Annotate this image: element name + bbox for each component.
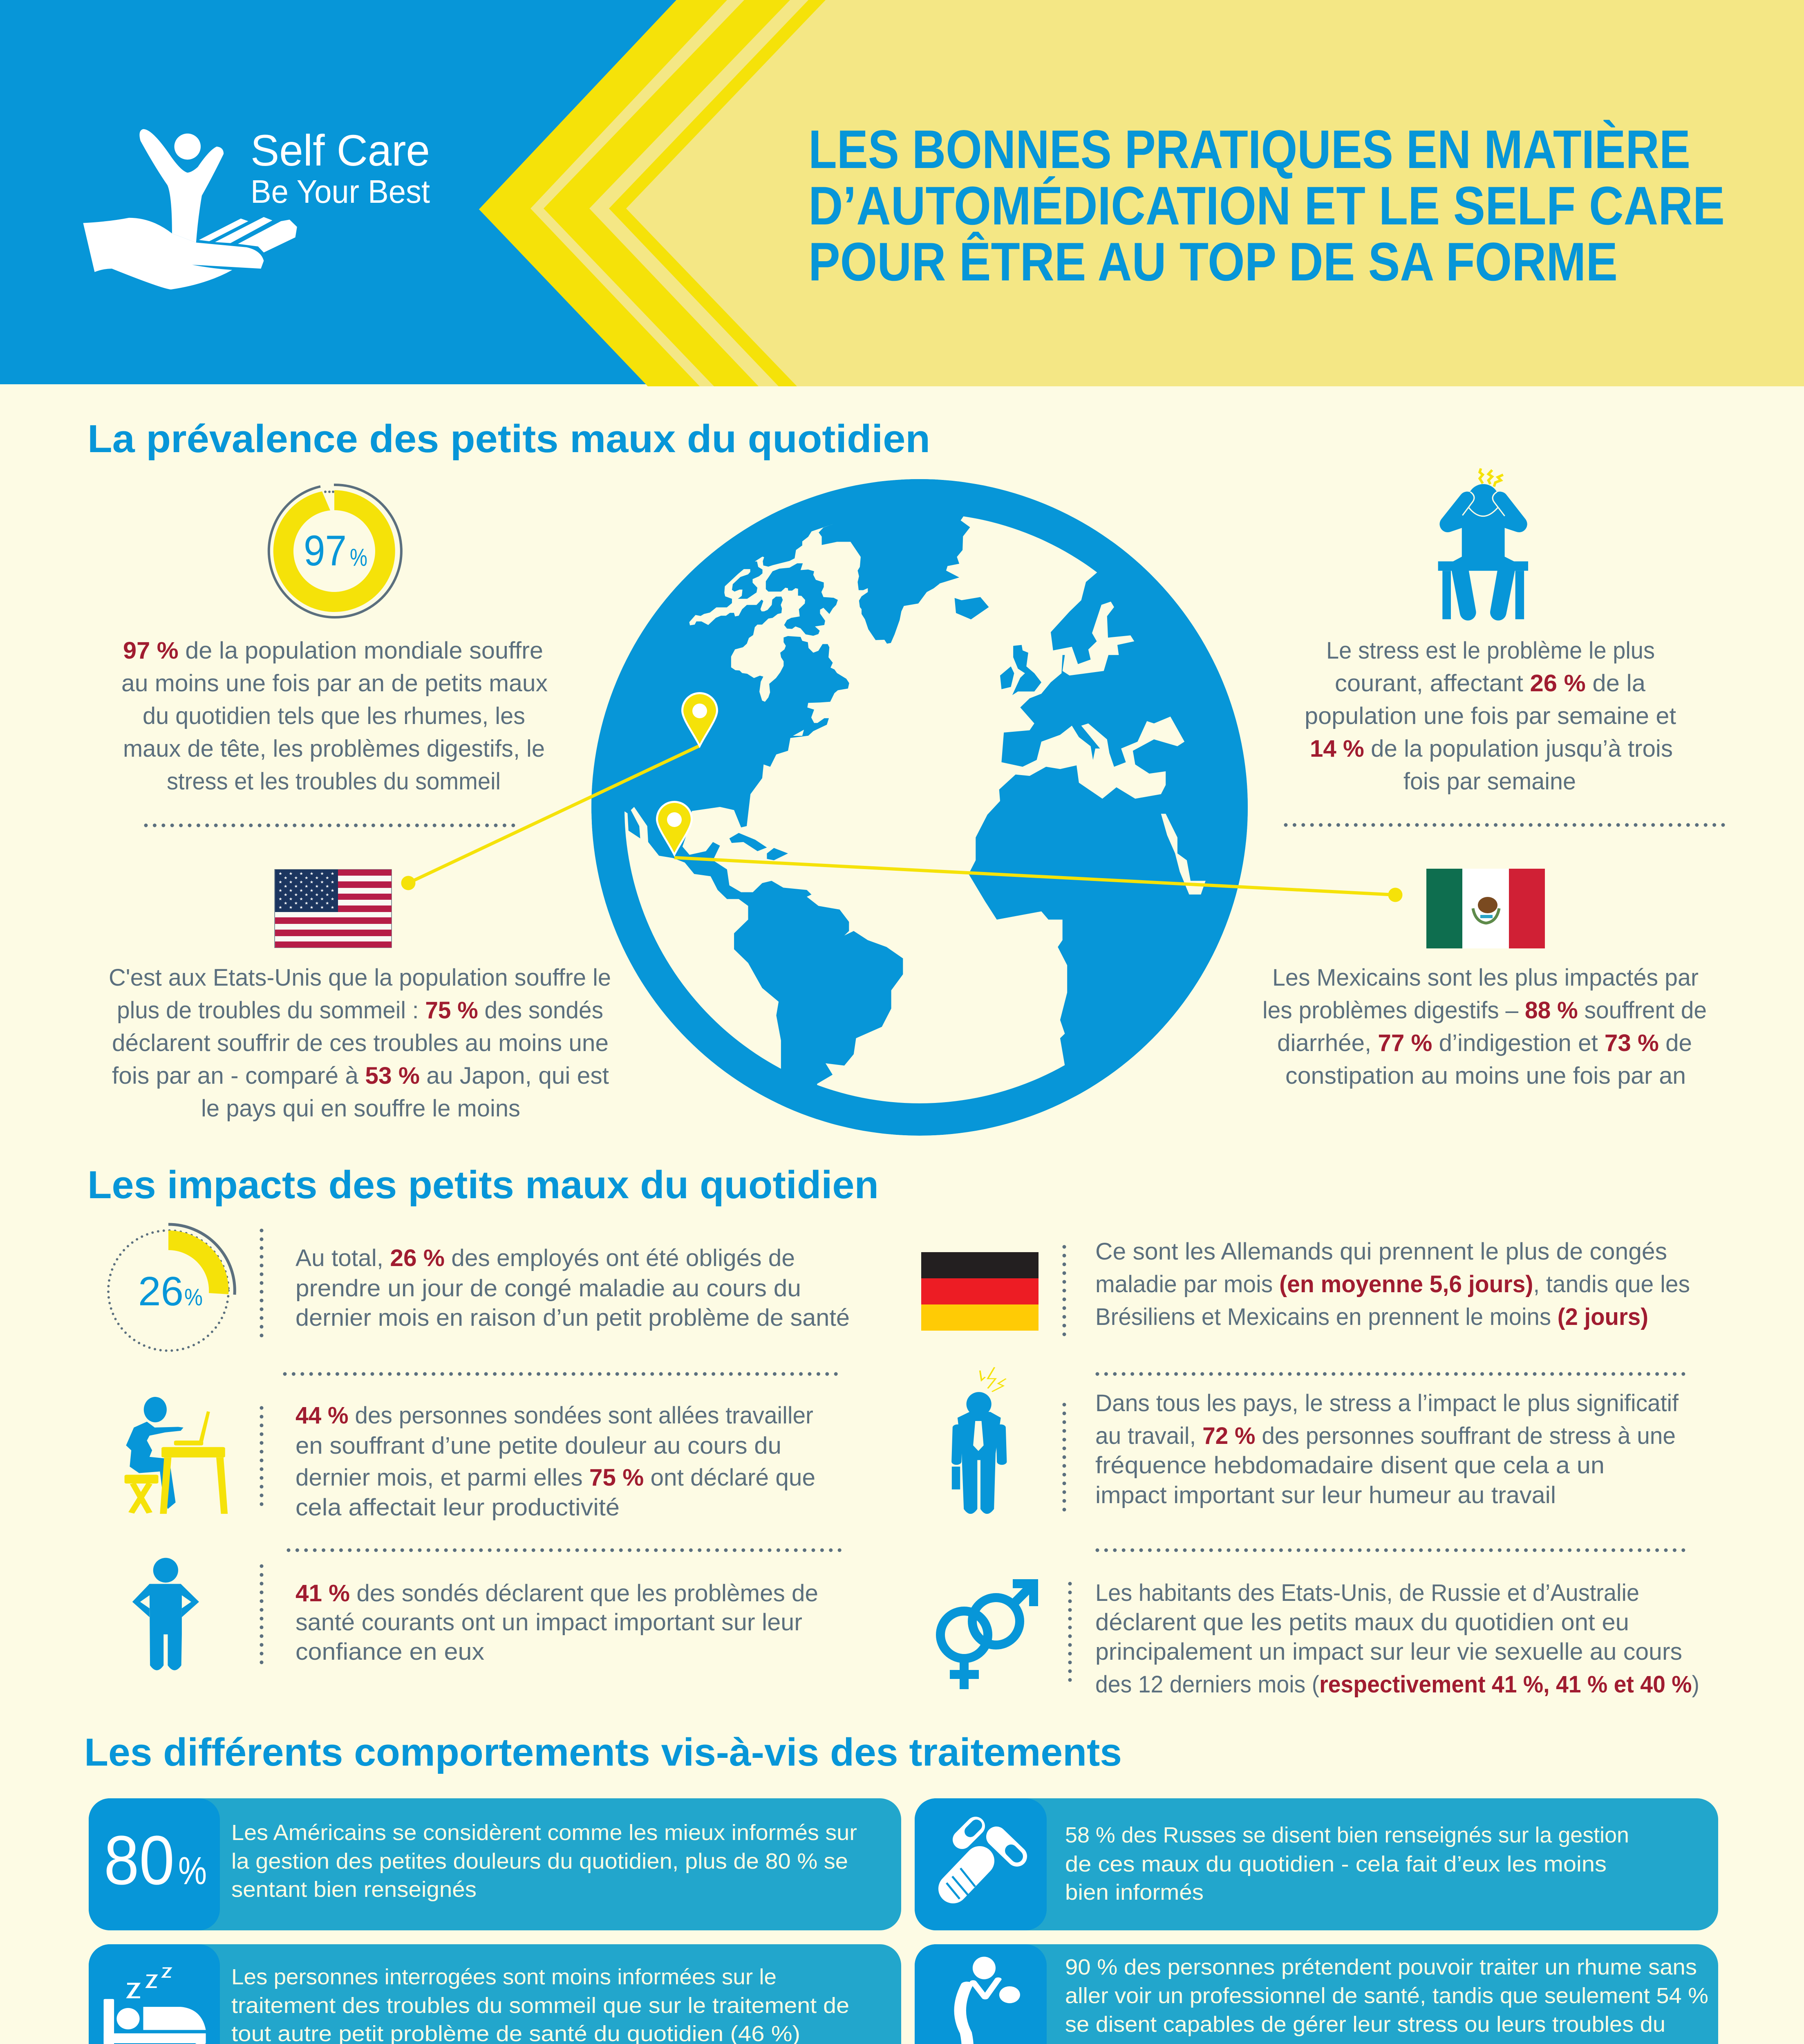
text: Mexico: les problèmes digestifs – 88 % souffrent de	[1262, 997, 1707, 1024]
panel text: Les personnes interrogées sont moins informées sur le	[231, 1965, 777, 1989]
text: stress: 14 % de la population jusqu’à trois	[1310, 735, 1673, 762]
panel: 80 percent informed	[89, 1798, 901, 1930]
panel text: la gestion des petites douleurs du quotidien, plus de 80 % se	[231, 1849, 848, 1874]
text: 44 percent	[295, 1402, 815, 1521]
text: sex life: principalement un impact sur leur vie sexuelle au cours	[1095, 1638, 1682, 1665]
text: 44 percent: dernier mois, et parmi elles 75 % ont déclaré que	[295, 1464, 815, 1491]
panel text	[231, 1820, 857, 1902]
text: sex life	[1095, 1580, 1699, 1698]
panel text: aller voir un professionnel de santé, tandis que seulement 54 %	[1065, 1983, 1708, 2008]
title: POUR ÊTRE AU TOP DE SA FORME	[808, 231, 1618, 292]
80 percent figure: 80	[104, 1822, 175, 1899]
text: Mexico: Les Mexicains sont les plus impactés par	[1272, 964, 1699, 991]
text: stress at work: fréquence hebdomadaire disent que cela a un	[1095, 1452, 1605, 1479]
80 percent figure: %	[178, 1849, 207, 1893]
text: 97 percent: stress et les troubles du sommeil	[167, 768, 501, 795]
text: 41 percent: 41 % des sondés déclarent que les problèmes de	[295, 1580, 818, 1607]
text: 97 percent: 97 % de la population mondiale souffre	[123, 637, 543, 664]
icon: coughing person	[960, 1957, 1020, 2044]
text: 26 percent sick leave: dernier mois en raison d’un petit problème de santé	[295, 1304, 850, 1331]
logo text: Be Your Best	[251, 173, 430, 210]
panel text: traitement des troubles du sommeil que sur le traitement de	[231, 1993, 849, 2018]
text: stress at work: impact important sur leur humeur au travail	[1095, 1482, 1556, 1508]
title	[808, 119, 1725, 292]
logo text	[251, 126, 430, 210]
text: stress: Le stress est le problème le plus	[1326, 637, 1655, 664]
text: stress at work: Dans tous les pays, le stress a l’impact le plus significatif	[1095, 1390, 1679, 1416]
text: 41 percent: santé courants ont un impact important sur leur	[295, 1609, 802, 1636]
icon: Germany flag	[921, 1252, 1039, 1331]
panel text	[231, 1965, 849, 2044]
text: Germany: Ce sont les Allemands qui prennent le plus de congés	[1095, 1238, 1667, 1265]
text: 44 percent: cela affectait leur productivité	[295, 1494, 620, 1521]
panel: cold vs stress	[915, 1944, 1718, 2044]
text: stress: fois par semaine	[1403, 768, 1576, 795]
text: 97 percent: du quotidien tels que les rhumes, les	[143, 703, 525, 729]
text: USA: plus de troubles du sommeil : 75 % des sondés	[117, 997, 603, 1024]
text: 26 percent sick leave: prendre un jour de congé maladie au cours du	[295, 1275, 801, 1302]
text: stress at work	[1095, 1390, 1679, 1508]
text: USA: déclarent souffrir de ces troubles au moins une	[112, 1030, 609, 1056]
text: Mexico	[1262, 964, 1707, 1089]
chart: 97 percent donut: %	[350, 544, 367, 571]
connector dot: USA	[401, 876, 415, 890]
chart: 26 percent wedge: %	[184, 1284, 203, 1311]
connector line: Mexico	[674, 858, 1395, 895]
chart: 26 percent wedge: 26	[138, 1269, 184, 1314]
panel text	[1065, 1955, 1708, 2044]
text: Mexico: constipation au moins une fois par an	[1285, 1062, 1686, 1089]
chart: 26 percent wedge	[108, 1224, 235, 1351]
text: 41 percent	[295, 1580, 818, 1665]
text: Mexico: diarrhée, 77 % d’indigestion et 73 % de	[1277, 1030, 1692, 1056]
heading: prevalence: La prévalence des petits maux du quotidien	[87, 417, 930, 461]
text: Germany	[1095, 1238, 1690, 1330]
text: USA	[109, 964, 611, 1122]
chart: 97 percent donut: 97	[304, 527, 347, 575]
text: 97 percent: au moins une fois par an de petits maux	[121, 670, 548, 697]
panel text: bien informés	[1065, 1880, 1204, 1905]
text: 44 percent: en souffrant d’une petite douleur au cours du	[295, 1432, 781, 1459]
panel text: 58 % des Russes se disent bien renseignés sur la gestion	[1065, 1823, 1629, 1847]
text: sex life: Les habitants des Etats-Unis, de Russie et d’Australie	[1095, 1580, 1639, 1606]
icon: person sleeping in bed	[104, 1968, 206, 2044]
panel text: sentant bien renseignés	[231, 1877, 477, 1902]
text: sex life: des 12 derniers mois (respectivement 41 %, 41 % et 40 %)	[1095, 1671, 1699, 1698]
text: 97 percent: maux de tête, les problèmes digestifs, le	[123, 735, 545, 762]
icon: self care logo hand and person	[83, 129, 297, 289]
heading: behaviours: Les différents comportements vis-à-vis des traitements	[84, 1730, 1122, 1774]
icon: stressed businessman	[952, 1367, 1006, 1514]
icon: confident standing person	[132, 1558, 199, 1670]
chart: 97 percent donut	[269, 485, 401, 617]
icon: gender symbols	[940, 1579, 1038, 1689]
panel text	[1065, 1823, 1629, 1905]
text: stress: population une fois par semaine et	[1305, 703, 1676, 729]
icon: map pin USA	[681, 692, 718, 748]
text: 26 percent sick leave	[295, 1245, 850, 1331]
text: stress at work: au travail, 72 % des personnes souffrant de stress à une	[1095, 1423, 1676, 1449]
text: stress	[1305, 637, 1676, 795]
header banner	[0, 0, 1804, 387]
text: USA: fois par an - comparé à 53 % au Japon, qui est	[112, 1062, 609, 1089]
panel text: 90 % des personnes prétendent pouvoir traiter un rhume sans	[1065, 1955, 1697, 1979]
text: Germany: maladie par mois (en moyenne 5,6 jours), tandis que les	[1095, 1271, 1690, 1298]
icon: Mexico flag	[1426, 869, 1545, 948]
text: USA: C'est aux Etats-Unis que la population souffre le	[109, 964, 611, 991]
text: 97 percent	[121, 637, 548, 795]
panel text: se disent capables de gérer leur stress ou leurs troubles du	[1065, 2012, 1665, 2037]
connector dot: Mexico	[1388, 888, 1403, 902]
panel text: Les Américains se considèrent comme les mieux informés sur	[231, 1820, 857, 1845]
text: sex life: déclarent que les petits maux du quotidien ont eu	[1095, 1609, 1629, 1636]
panel: Russians informed	[915, 1798, 1718, 1930]
text: 26 percent sick leave: Au total, 26 % des employés ont été obligés de	[295, 1245, 795, 1271]
globe map	[591, 479, 1248, 1136]
icon: map pin Mexico	[656, 801, 693, 857]
logo text: Self Care	[251, 126, 430, 175]
icon: USA flag	[275, 870, 392, 948]
text: USA: le pays qui en souffre le moins	[201, 1095, 520, 1122]
panel: sleep	[89, 1944, 901, 2044]
text: stress: courant, affectant 26 % de la	[1335, 670, 1646, 697]
icon: pills	[947, 1825, 1017, 1899]
icon: person working at laptop	[125, 1397, 228, 1514]
connector line: USA	[408, 746, 699, 883]
text: 41 percent: confiance en eux	[295, 1638, 484, 1665]
icon: stressed seated person	[1438, 468, 1528, 621]
text: 44 percent: 44 % des personnes sondées sont allées travailler	[295, 1402, 813, 1429]
text: Germany: Brésiliens et Mexicains en prennent le moins (2 jours)	[1095, 1304, 1648, 1330]
panel text: de ces maux du quotidien - cela fait d’eux les moins	[1065, 1852, 1607, 1876]
heading: impacts: Les impacts des petits maux du quotidien	[87, 1163, 879, 1207]
